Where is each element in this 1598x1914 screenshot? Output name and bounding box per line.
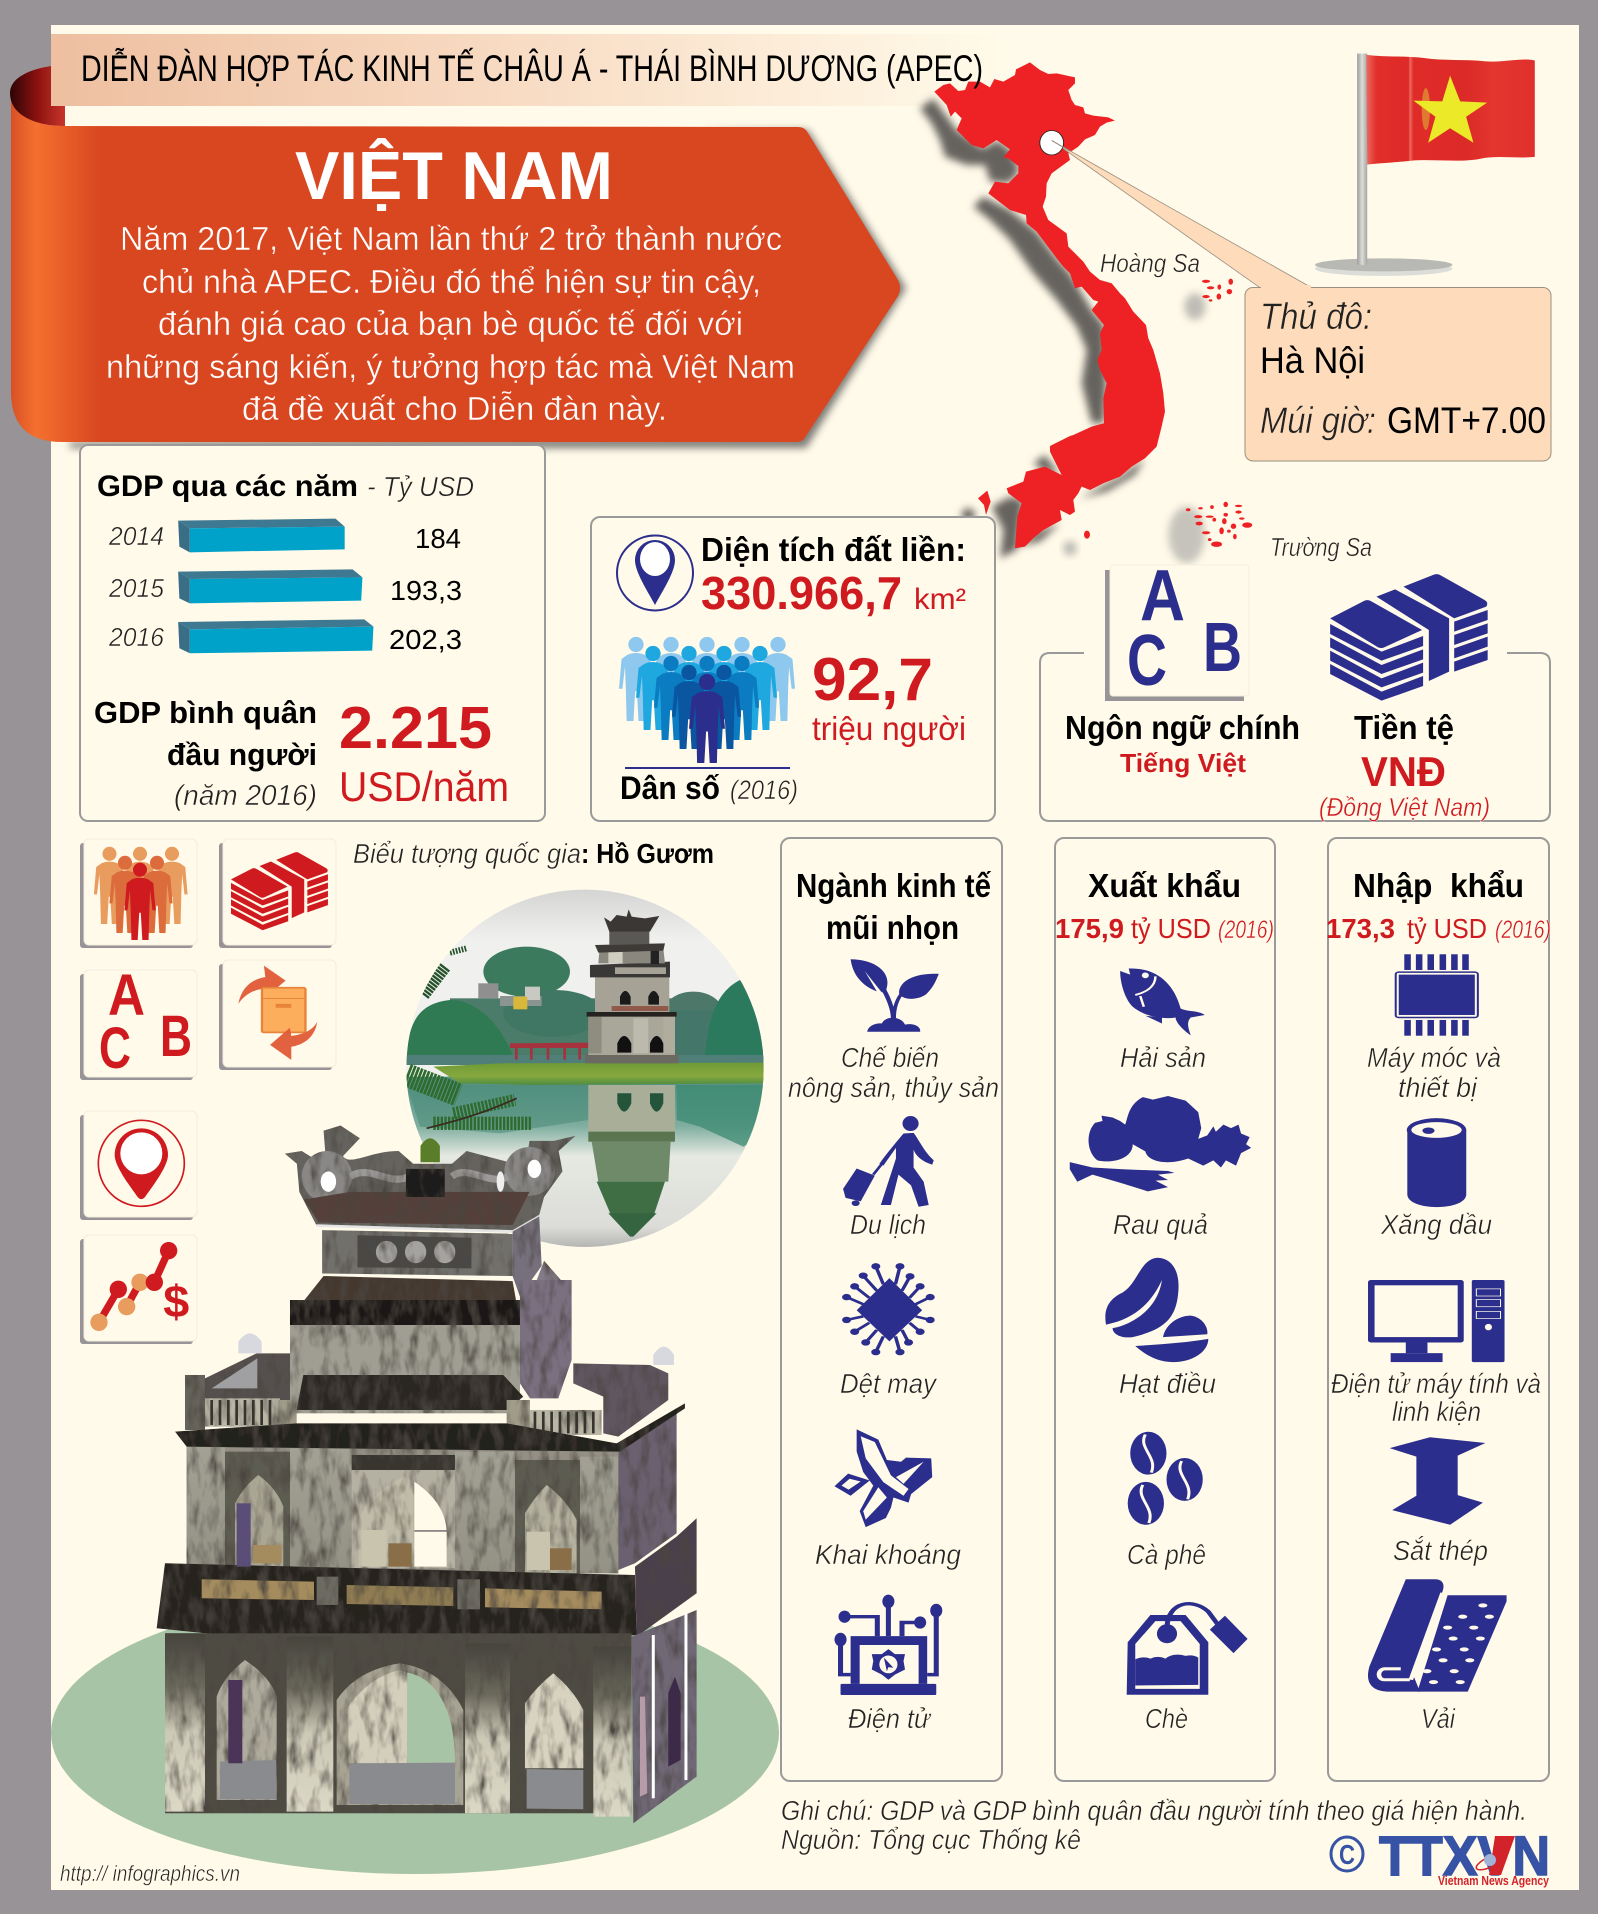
bar chart: 184: [415, 523, 461, 554]
icon: textile: [842, 1263, 935, 1355]
icon tile: GDP trend: [80, 1235, 197, 1344]
national symbol caption: : Hồ Gươm: [581, 838, 714, 869]
Con Dao shadow: [1063, 541, 1077, 556]
midground tree line: [450, 998, 672, 1055]
icon tile: language: B: [160, 1004, 192, 1069]
GDP chart title: GDP qua các năm: [97, 470, 358, 503]
national symbol caption: [353, 838, 714, 869]
icon tile: location: [80, 1111, 197, 1220]
industries heading: [796, 867, 992, 946]
right balcony: [573, 1363, 668, 1437]
label: electronics and computers: Điện tử máy tính và: [1331, 1368, 1541, 1399]
callout: capital and timezone: [1245, 285, 1551, 461]
population label: Dân số: [620, 770, 720, 806]
label: electronics: Điện tử: [848, 1703, 932, 1734]
logo: TTXVN: Vietnam News Agency: [1438, 1874, 1549, 1888]
label: coffee: Cà phê: [1127, 1539, 1206, 1570]
imports value: 173,3: [1326, 913, 1395, 944]
mainland: [934, 62, 1165, 548]
ground floor: [165, 1633, 632, 1813]
map shadow: [920, 98, 1145, 558]
label: Hoang Sa: Hoàng Sa: [1100, 248, 1200, 278]
central wall: [290, 1317, 520, 1413]
label: seafood: Hải sản: [1120, 1042, 1206, 1073]
label: tea: Chè: [1145, 1703, 1188, 1734]
exports value: (2016): [1218, 916, 1274, 944]
panel: GDP: [80, 445, 545, 821]
label: processing: [788, 1042, 999, 1103]
icon tile: people: [80, 839, 197, 948]
logo: TTXVN: C: [1339, 1839, 1355, 1870]
upper floor wall: [187, 1443, 618, 1573]
GDP unit: - Tỷ USD: [367, 471, 474, 502]
icon: machinery chip: [1396, 954, 1478, 1036]
exports value: [1055, 913, 1274, 944]
small tower: [585, 909, 678, 1063]
icon: computer: [1368, 1280, 1505, 1362]
label: processing: Chế biến: [841, 1042, 939, 1073]
label: machinery: thiết bị: [1398, 1072, 1478, 1103]
beak join: [1261, 285, 1311, 290]
banner paragraph: Năm 2017, Việt Nam lần thứ 2 trở thành nước: [120, 220, 782, 257]
banner paragraph: [106, 220, 795, 427]
Con Dao island: [1084, 531, 1090, 539]
area label: Diện tích đất liền:: [701, 531, 966, 568]
cornice: [175, 1403, 685, 1452]
icon: fabric roll: [1368, 1579, 1507, 1692]
imports value: tỷ USD: [1407, 913, 1487, 944]
label: processing: nông sản, thủy sản: [788, 1072, 999, 1103]
tower reflection: [588, 1085, 675, 1237]
icon: vegetables: [1070, 1096, 1251, 1191]
industries heading: Ngành kinh tế: [796, 867, 992, 904]
icon tile: trade box: [219, 960, 336, 1070]
water reflections of trees: [677, 1085, 767, 1147]
label: machinery: [1367, 1042, 1501, 1103]
label: produce: Rau quả: [1113, 1209, 1208, 1240]
icon: population crowd: [619, 637, 795, 763]
banner paragraph: đánh giá cao của bạn bè quốc tế đối với: [158, 305, 743, 342]
icon tile: money: [219, 839, 336, 948]
panel: language and currency: [1040, 556, 1550, 822]
icon: ABC tile: A: [1140, 556, 1185, 636]
Truong Sa shadow: [1168, 507, 1205, 563]
label: mining: Khai khoáng: [815, 1539, 961, 1570]
icon: money stack: [1330, 574, 1488, 701]
Hoang Sa islands: [1202, 279, 1233, 302]
map of Vietnam: [920, 62, 1206, 563]
bar chart: 202,3: [389, 624, 462, 655]
Paracel and Spratly islands: [1040, 131, 1312, 547]
ribbon body: [11, 93, 900, 442]
timezone label: Múi giờ:: [1260, 400, 1376, 441]
label: fabric: Vải: [1421, 1703, 1456, 1734]
footnote: [781, 1795, 1527, 1855]
industries heading: mũi nhọn: [826, 909, 959, 946]
currency value: VNĐ: [1361, 748, 1446, 795]
Turtle Tower cut-out: [157, 1126, 697, 1823]
Phu Quoc island: [978, 491, 991, 515]
callout box: [1245, 288, 1551, 461]
bar chart: 2016: [108, 622, 165, 652]
panel: key industries: [781, 838, 1002, 1781]
GDP per capita label: [94, 695, 317, 812]
icon: fish: [1120, 968, 1205, 1035]
ribbon shadow: [70, 130, 906, 448]
bar chart: 193,3: [390, 575, 462, 606]
population year: (2016): [730, 775, 798, 805]
capital label: Thủ đô:: [1260, 296, 1372, 337]
bar chart: 2014: [108, 521, 164, 551]
language heading: Ngôn ngữ chính: [1065, 709, 1300, 746]
label: cashew: Hạt điều: [1119, 1368, 1216, 1399]
population divider: [625, 767, 790, 769]
icon: location pin: [617, 536, 693, 610]
area value: 330.966,7: [701, 567, 902, 619]
banner paragraph: đã đề xuất cho Diễn đàn này.: [242, 390, 667, 427]
GDP per capita label: GDP bình quân: [94, 695, 317, 730]
language value: Tiếng Việt: [1120, 748, 1246, 778]
label: Truong Sa: Trường Sa: [1270, 532, 1372, 562]
tower roof details: [316, 1138, 541, 1232]
logo: TTXVN: TTXVN: [1379, 1824, 1550, 1887]
exports heading: Xuất khẩu: [1088, 867, 1241, 904]
currency name: (Đồng Việt Nam): [1319, 792, 1490, 822]
icon tile: GDP trend: $: [163, 1276, 189, 1327]
national symbol caption: Biểu tượng quốc gia: [353, 838, 581, 869]
icon: traveller: [843, 1116, 934, 1207]
ribbon curl: [10, 66, 65, 126]
imports heading: Nhập khẩu: [1353, 867, 1524, 904]
icon: electronics: [834, 1595, 942, 1695]
banner paragraph: những sáng kiến, ý tưởng hợp tác mà Việt Nam: [106, 348, 795, 385]
left balcony: [205, 1353, 290, 1400]
GDP per capita label: đầu người: [167, 737, 317, 772]
icon: oil barrel: [1407, 1118, 1466, 1207]
icon: mining: [834, 1429, 932, 1527]
banner heading: VIỆT NAM: [295, 137, 613, 214]
icon tile: language: A: [108, 963, 145, 1028]
banner paragraph: chủ nhà APEC. Điều đó thể hiện sự tin cậy,: [142, 263, 761, 300]
Hanoi marker: [1040, 131, 1070, 155]
foreground branches: [407, 948, 532, 1128]
icon: ABC tile: [1105, 556, 1249, 701]
red ribbon banner: [10, 66, 906, 448]
icon: ABC tile: B: [1203, 608, 1242, 686]
bar chart: 2015: [108, 573, 165, 603]
icon: Vietnam flag: [1315, 54, 1535, 276]
header strip: [51, 34, 1001, 106]
website credit: http:// infographics.vn: [60, 1861, 240, 1886]
population value: 92,7: [812, 646, 933, 713]
upper windows: [225, 1452, 290, 1568]
photo: Turtle Tower on Hoan Kiem lake: [400, 880, 780, 1253]
label: textiles: Dệt may: [840, 1368, 938, 1399]
GDP per capita value: 2.215: [339, 695, 492, 761]
label: electronics and computers: [1331, 1368, 1541, 1427]
tower details without stains: [212, 1333, 686, 1809]
tower top stories: [285, 1126, 576, 1324]
icon: tea bag: [1127, 1604, 1248, 1695]
ground ellipse: [51, 1592, 779, 1874]
header title: DIỄN ĐÀN HỢP TÁC KINH TẾ CHÂU Á - THÁI BÌNH DƯƠNG (APEC): [81, 47, 983, 89]
capital name: Hà Nội: [1260, 340, 1365, 381]
Hanoi callout beak: [1052, 140, 1312, 288]
Hoang Sa shadow: [1184, 293, 1206, 320]
timezone value: GMT+7.00: [1387, 400, 1546, 441]
icon: seedling: [851, 959, 939, 1032]
imports value: (2016): [1495, 916, 1551, 944]
panel: imports: [1326, 838, 1551, 1781]
imports value: [1326, 913, 1551, 944]
icon: steel beam: [1390, 1437, 1485, 1525]
exports value: tỷ USD: [1131, 913, 1211, 944]
tower lower stories: [157, 1280, 697, 1823]
area unit: km²: [914, 583, 966, 616]
label: electronics and computers: linh kiện: [1392, 1396, 1481, 1427]
icon: coffee beans: [1128, 1432, 1203, 1525]
icon: ABC tile: C: [1127, 621, 1167, 701]
icon tile: language: C: [99, 1016, 131, 1081]
balcony band: [157, 1563, 637, 1648]
icon tile: language: [80, 963, 197, 1081]
GDP per capita unit: USD/năm: [339, 763, 509, 810]
footnote: Nguồn: Tổng cục Thống kê: [781, 1824, 1081, 1855]
GDP per capita label: (năm 2016): [174, 780, 317, 812]
label: steel: Sắt thép: [1393, 1535, 1488, 1566]
panel: exports: [1055, 838, 1275, 1781]
panel: area and population: [591, 517, 995, 821]
label: petroleum: Xăng dầu: [1380, 1209, 1492, 1240]
bar chart: [108, 519, 462, 655]
icon: cashew: [1105, 1258, 1208, 1362]
population unit: triệu người: [812, 710, 966, 747]
exports value: 175,9: [1055, 913, 1124, 944]
Truong Sa islands: [1186, 502, 1252, 547]
label: tourism: Du lịch: [850, 1209, 926, 1240]
currency heading: Tiền tệ: [1354, 709, 1454, 746]
label: machinery: Máy móc và: [1367, 1042, 1501, 1073]
